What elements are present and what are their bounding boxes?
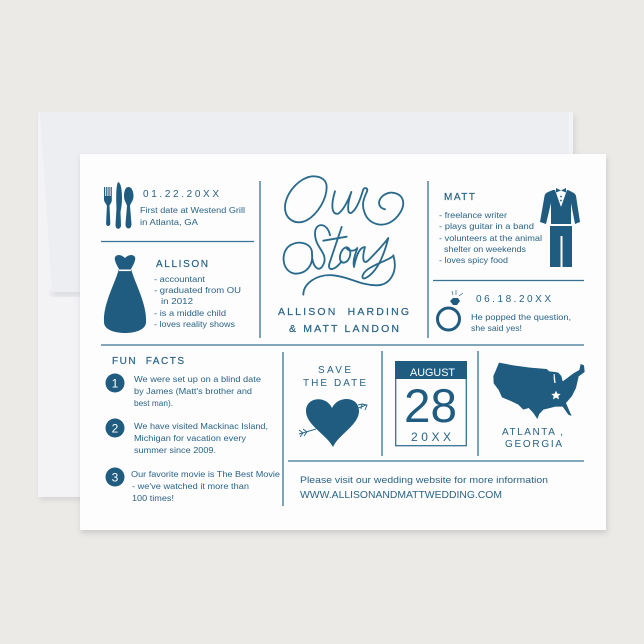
panel: save the date [299,365,367,447]
list: shelter on weekends [444,244,526,254]
heading: FUN FACTS [112,356,184,367]
icon: heart with arrow [299,399,367,447]
list: - loves reality shows [154,319,235,329]
date: 01.22.20XX [143,189,219,200]
city: ATLANTA , [502,427,563,438]
panel: proposal [438,290,571,333]
fact 1: best man). [134,398,173,408]
list: - volunteers at the animal [439,233,542,243]
heading: THE DATE [303,378,366,389]
panel: calendar [395,361,467,446]
description: she said yes! [471,323,522,333]
panel: website: WWW.ALLISONANDMATTWEDDING.COM [300,489,502,501]
panel: website: Please visit our wedding website for more information [300,475,548,486]
fact 2 [106,418,268,455]
fact 1: We were set up on a blind date [134,374,261,384]
day: 28 [404,379,457,432]
fact 1 [106,374,261,408]
fact 3: Our favorite movie is The Best Movie [131,469,280,479]
fact 3: - we've watched it more than [132,481,249,491]
script lettering [284,176,403,295]
couple names [278,306,409,335]
list: - freelance writer [439,210,507,220]
list [439,210,542,265]
fact 3: 3 [112,470,119,484]
list: - accountant [154,274,206,284]
panel: location [493,363,585,450]
fact 2: summer since 2009. [134,445,216,455]
list: - is a middle child [154,308,226,318]
fact 1: 1 [112,376,119,390]
panel: matt [439,188,580,267]
name: ALLISON [156,259,208,270]
year: 20XX [411,430,451,444]
fact 3 [106,468,280,503]
couple names: ALLISON HARDING [278,306,409,318]
icon: dress [104,255,146,333]
panel: fun facts [106,356,280,503]
description [140,205,245,227]
couple names: & MATT LANDON [289,323,399,335]
panel: allison [104,255,241,333]
icon: ring [438,290,463,330]
fact 1: by James (Matt's brother and [134,386,252,396]
list: - plays guitar in a band [439,221,534,231]
panel: first date [104,182,245,229]
icon: usa map [493,363,585,419]
description: in Atlanta, GA [140,217,198,227]
envelope [38,112,575,500]
list: - graduated from OU [154,285,241,295]
list [154,274,241,329]
icon: tuxedo [540,188,580,267]
name: MATT [444,192,475,203]
description: First date at Westend Grill [140,205,245,215]
heading [303,365,366,389]
date: 06.18.20XX [476,294,551,305]
month: AUGUST [410,367,455,379]
title: Our Story [278,176,409,335]
description: He popped the question, [471,312,571,322]
fact 2: We have visited Mackinac Island, [134,421,268,431]
heading: SAVE [318,365,351,376]
fact 3: 100 times! [132,493,174,503]
card [80,154,607,533]
city: GEORGIA [505,439,562,450]
city [502,427,563,450]
fact 2: Michigan for vacation every [134,433,247,443]
panel: website [300,475,548,501]
list: - loves spicy food [439,255,508,265]
fact 2: 2 [112,422,119,436]
icon: fork knife spoon [104,182,134,229]
description [471,312,571,333]
list: in 2012 [161,296,193,306]
